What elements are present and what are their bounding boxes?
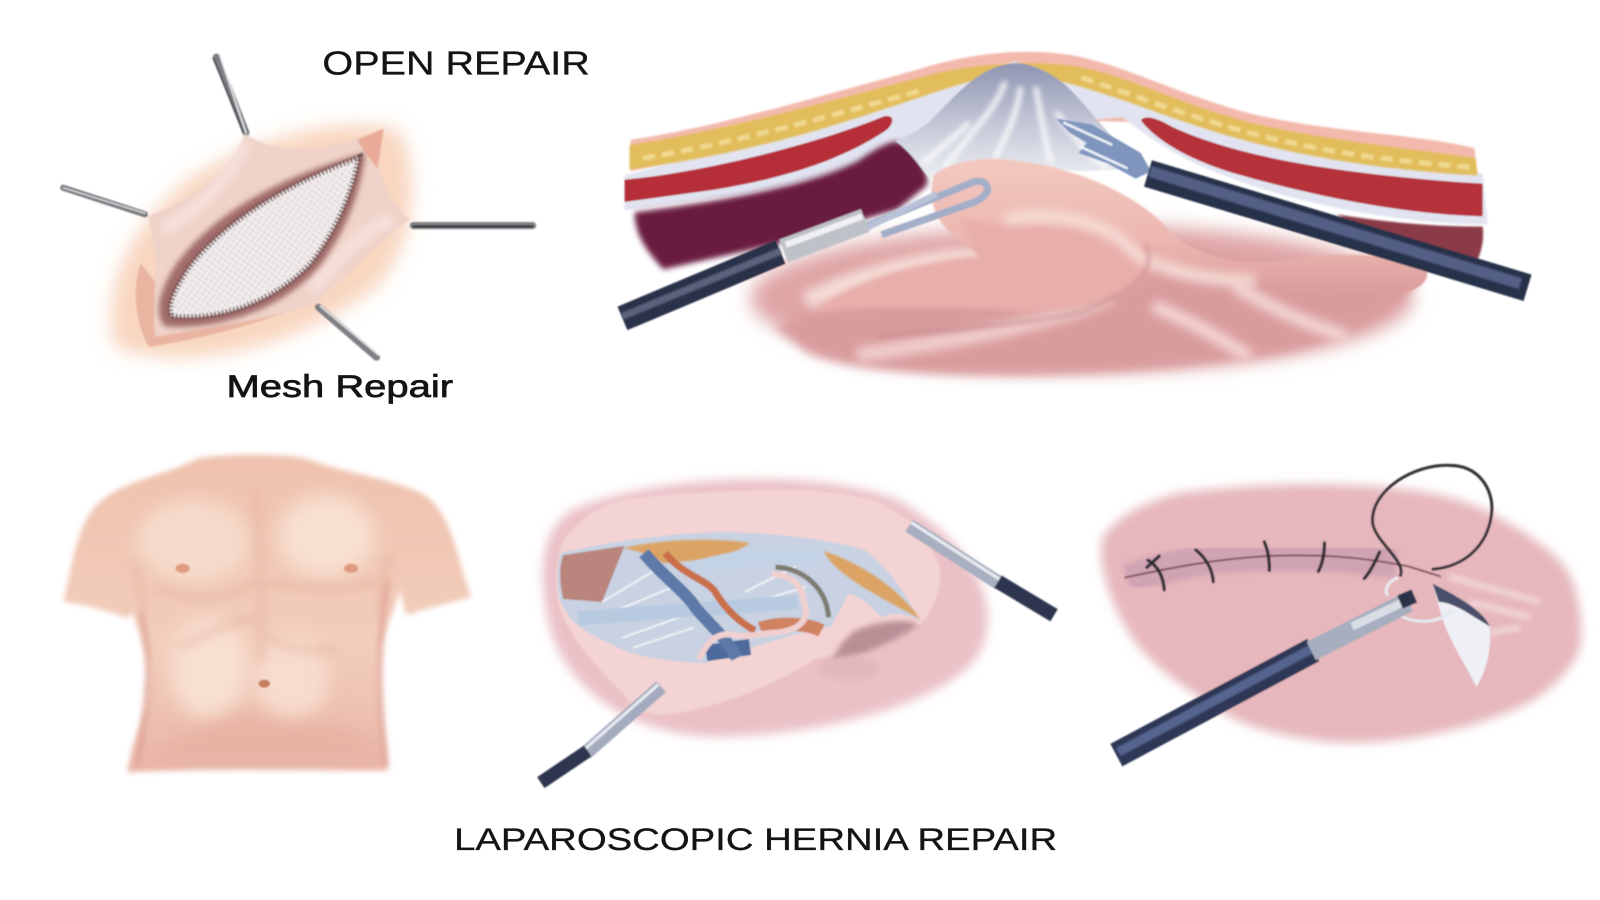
herniated bowel [816, 159, 1427, 337]
torso body [63, 455, 471, 772]
wound edge [136, 263, 311, 347]
pink tissue [1101, 484, 1581, 743]
dark fold [832, 621, 918, 663]
stitches [1147, 542, 1380, 590]
needle [1386, 578, 1453, 621]
fibres [602, 566, 806, 648]
heading: mesh repair: Mesh Repair [227, 368, 453, 404]
cavity [558, 532, 919, 663]
wound line [1124, 555, 1441, 578]
panel: open mesh repair illustration [63, 57, 533, 357]
wound band [1128, 556, 1396, 580]
skin layer [631, 52, 1478, 182]
fat layer [630, 63, 1478, 176]
raised membrane [556, 489, 941, 715]
vein [644, 553, 737, 658]
panel: male torso [63, 455, 471, 772]
grasper lower left [541, 685, 661, 783]
artery [665, 553, 755, 631]
muscle [560, 546, 624, 602]
navel [259, 680, 270, 688]
deep vein [706, 647, 750, 653]
abdominal cavity dark right [1337, 214, 1483, 269]
tissue streaks [1449, 577, 1540, 633]
chest highlights [278, 495, 376, 577]
side shading [138, 582, 388, 765]
fat pads [623, 540, 920, 619]
suture loop [1372, 465, 1492, 577]
cord arch [689, 557, 822, 573]
heading: laparoscopic hernia repair: LAPAROSCOPIC HERNIA REPAIR [454, 821, 1057, 857]
retractors [63, 57, 533, 357]
grasper upper right [909, 522, 1054, 615]
tissue halo [543, 479, 988, 737]
clip applier instrument [1056, 118, 1528, 288]
grasper instrument [622, 181, 988, 318]
muscle right [1141, 117, 1483, 216]
cord loop [699, 573, 806, 659]
retracted tissue [148, 131, 410, 337]
tissue flap [1433, 584, 1490, 687]
peritoneum and organs [750, 224, 1415, 375]
incision shadow [159, 153, 365, 327]
lump [818, 656, 880, 681]
abdominal cavity dark left [635, 142, 927, 269]
panel: laparoscopic view of inguinal region [541, 479, 1054, 783]
panel: laparoscopic suturing [1101, 465, 1581, 755]
pale vessel [579, 602, 798, 618]
lining membrane [624, 61, 1488, 224]
panel: hernia cross-section [622, 52, 1528, 375]
needle driver [1116, 596, 1414, 755]
lower abdomen shading [138, 712, 383, 760]
muscle shading [135, 490, 388, 663]
heading: open repair: OPEN REPAIR [322, 45, 590, 82]
muscle left [624, 116, 892, 202]
nipples [176, 564, 190, 573]
wound corner [357, 129, 384, 168]
hernia sac [895, 63, 1145, 179]
mesh with sutures [170, 157, 359, 317]
tissue folds [163, 143, 393, 291]
skin halo [111, 125, 412, 357]
